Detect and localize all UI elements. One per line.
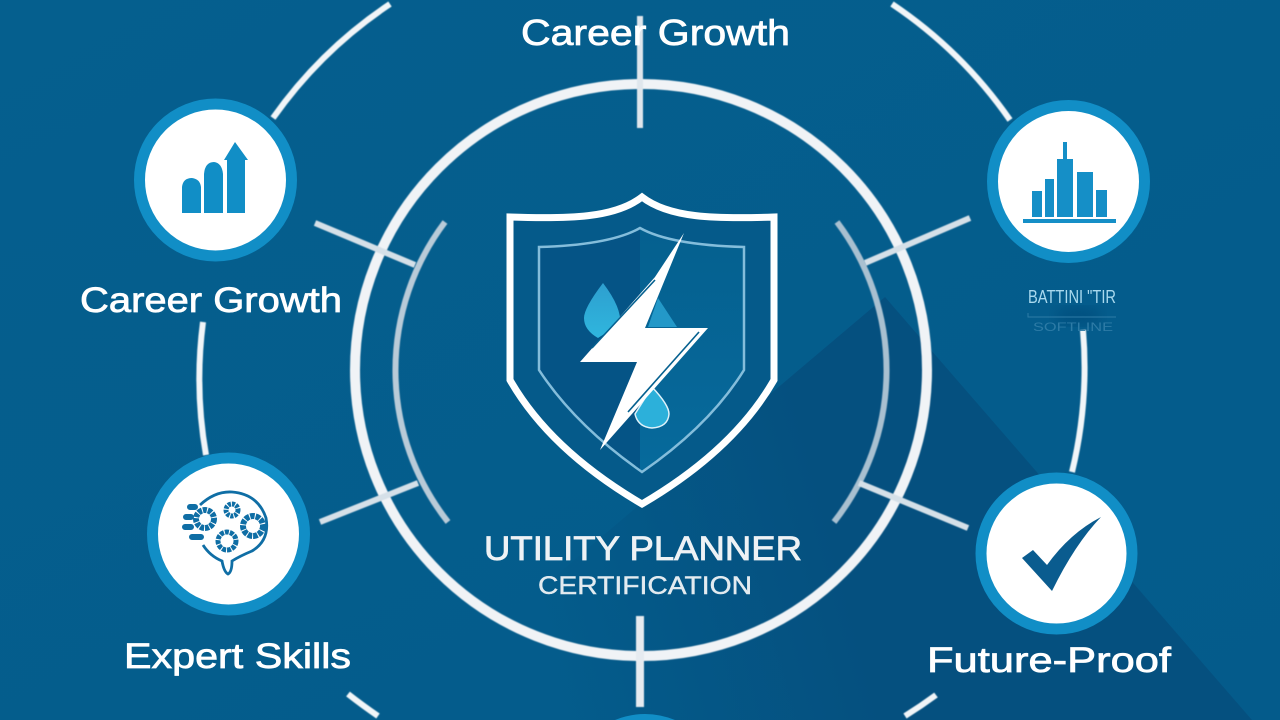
bolt slits — [592, 280, 699, 412]
shield emblem — [510, 197, 774, 504]
dark smudge — [1054, 307, 1102, 325]
icon: check mark — [1022, 517, 1101, 591]
node: future-proof — [981, 478, 1132, 629]
inner ring — [355, 84, 927, 656]
outer ring segments — [199, 4, 1085, 716]
label: career growth: Career Growth — [80, 281, 342, 320]
connector lines — [315, 16, 970, 707]
node: career growth — [140, 104, 292, 256]
heading: utility planner: UTILITY PLANNER — [484, 530, 802, 568]
label: future-proof: Future-Proof — [927, 641, 1171, 680]
subheading: certification: CERTIFICATION — [538, 572, 752, 600]
shield outer — [510, 197, 774, 504]
inner arcs — [395, 222, 887, 522]
water drops — [584, 283, 677, 428]
faded label: SOFTLINE — [1033, 320, 1113, 334]
garbled label: BATTINI "TIR — [1028, 287, 1116, 307]
faded rule — [1028, 313, 1116, 317]
node: expert skills — [152, 458, 304, 610]
diagonal shadow — [385, 297, 1252, 720]
title: career growth top: Career Growth — [521, 12, 790, 53]
icon: skyline — [1023, 142, 1116, 223]
node: city — [992, 106, 1144, 258]
label: expert skills: Expert Skills — [124, 637, 351, 676]
icon: rising bars — [182, 142, 248, 213]
lightning bolt — [580, 233, 708, 450]
shield inner right half — [640, 228, 744, 472]
bottom node peek — [615, 714, 675, 720]
icon: brain with gears — [185, 492, 267, 574]
shield inner — [539, 228, 744, 472]
shield inner left half — [539, 228, 640, 472]
